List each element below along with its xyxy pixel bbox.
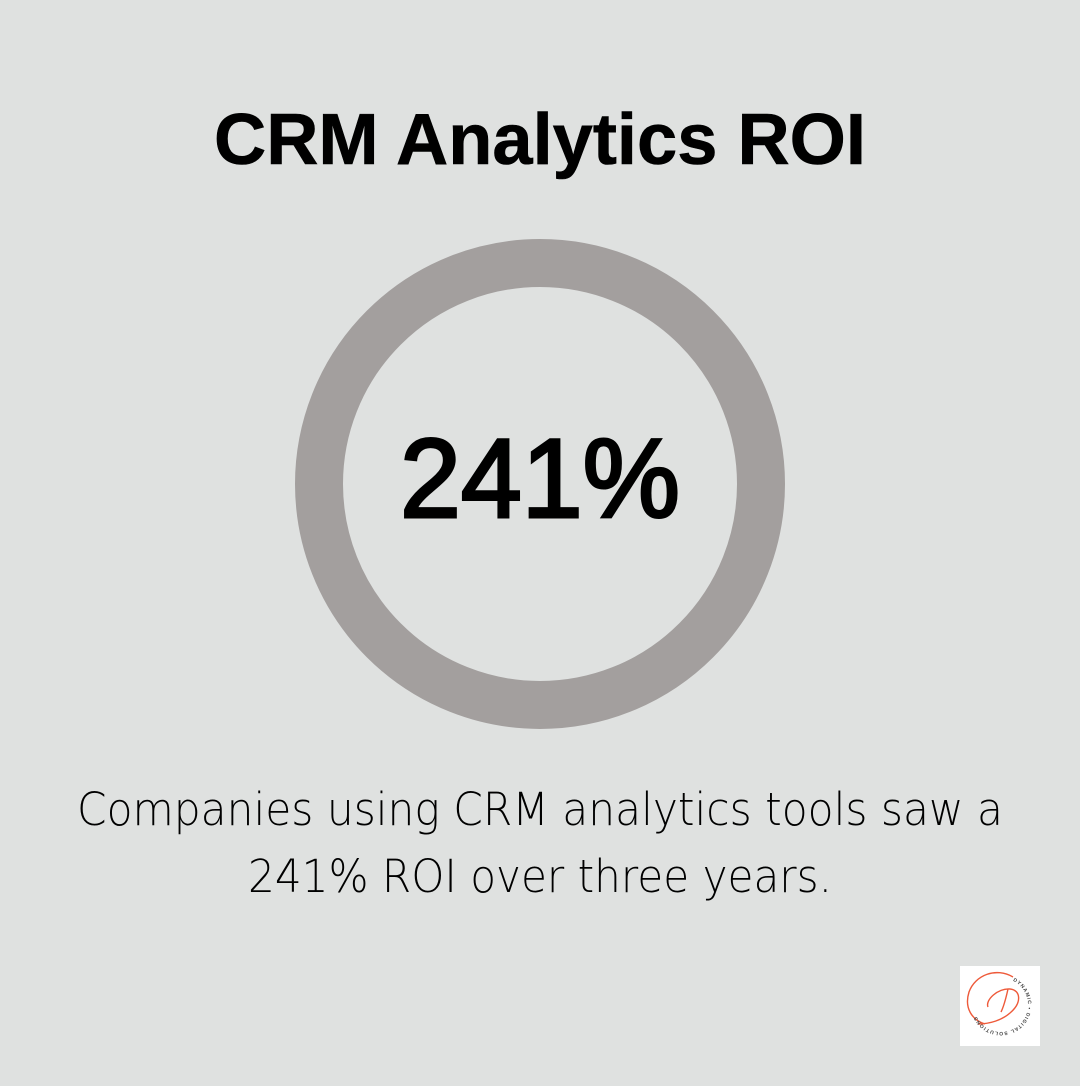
logo ring text: DYNAMIC • DIGITAL SOLUTIONS [974, 978, 1032, 1036]
donut ring [319, 263, 761, 705]
description text [77, 783, 1003, 903]
description text: Companies using CRM analytics tools saw a [77, 783, 1003, 836]
logo swirl [967, 973, 1019, 1024]
description text: 241% ROI over three years. [248, 850, 832, 903]
ring value: 241% [400, 416, 680, 541]
title: CRM Analytics ROI [214, 100, 866, 180]
logo badge [960, 966, 1040, 1046]
